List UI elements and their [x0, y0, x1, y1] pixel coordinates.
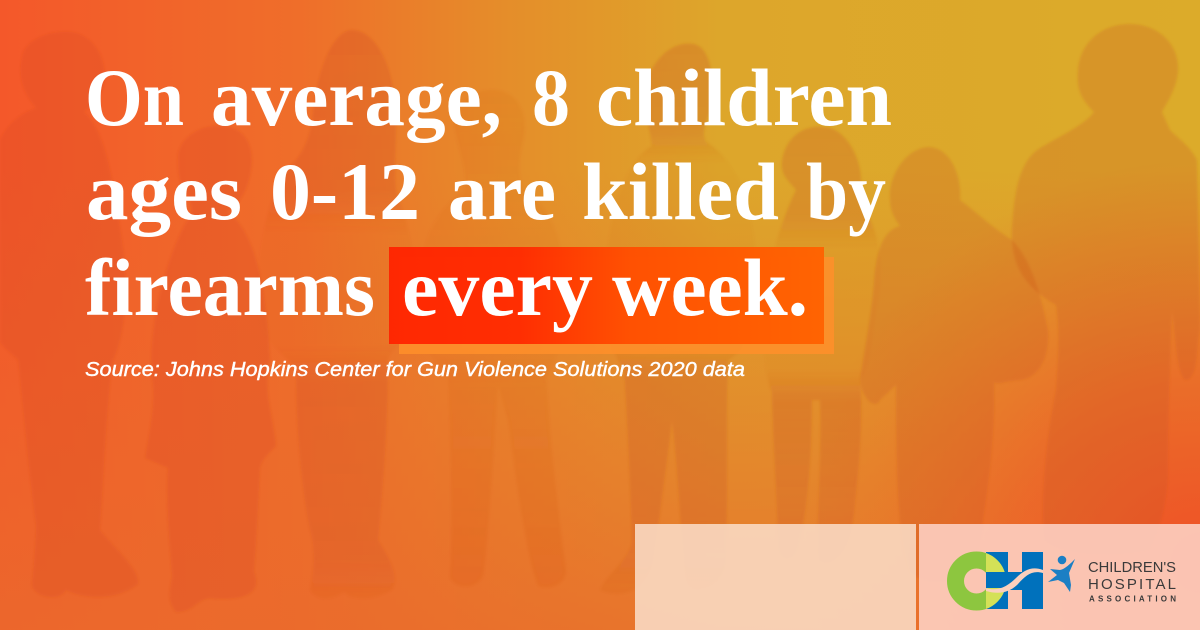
footer panel: left blank: [635, 524, 916, 630]
headline line 3: firearms: [85, 242, 375, 333]
logo mark: CH: [956, 552, 1043, 609]
highlight offset shadow box: [399, 257, 834, 354]
child 5: [600, 43, 756, 594]
highlight box: [389, 247, 824, 344]
highlighted phrase: every: [402, 242, 593, 333]
headline line 1: average,: [211, 52, 502, 143]
child 6: [764, 127, 881, 563]
logo wordmark: HOSPITAL: [1088, 576, 1176, 593]
child 8: [1012, 24, 1200, 555]
headline line 2: are: [448, 146, 556, 237]
logo: Children's Hospital Association: [956, 552, 1176, 609]
headline: [85, 52, 892, 333]
headline line 1: On: [85, 52, 184, 143]
headline line 1: children: [596, 52, 892, 143]
headline line 2: 0-12: [270, 146, 420, 237]
child 3: [256, 30, 417, 599]
headline line 1: [85, 52, 892, 143]
footer panel: logo: [919, 524, 1200, 630]
headline line 2: [86, 146, 886, 237]
logo wordmark: ASSOCIATION: [1089, 594, 1176, 604]
child 1: [0, 32, 138, 597]
child 2: [145, 125, 276, 612]
headline line 2: ages: [86, 146, 242, 237]
source note: Source: Johns Hopkins Center for Gun Violence Solutions 2020 data: [85, 359, 745, 381]
logo icon: leaping figure: [1048, 556, 1075, 592]
headline line 2: by: [806, 146, 886, 237]
child 4: [420, 90, 566, 587]
headline line 1: 8: [532, 52, 570, 143]
child 7: [860, 147, 1048, 581]
highlighted phrase: [402, 242, 808, 333]
headline line 2: killed: [582, 146, 779, 237]
logo wordmark: CHILDREN'S: [1088, 560, 1176, 576]
highlighted phrase: week.: [612, 242, 808, 333]
logo wordmark: [1088, 560, 1176, 604]
